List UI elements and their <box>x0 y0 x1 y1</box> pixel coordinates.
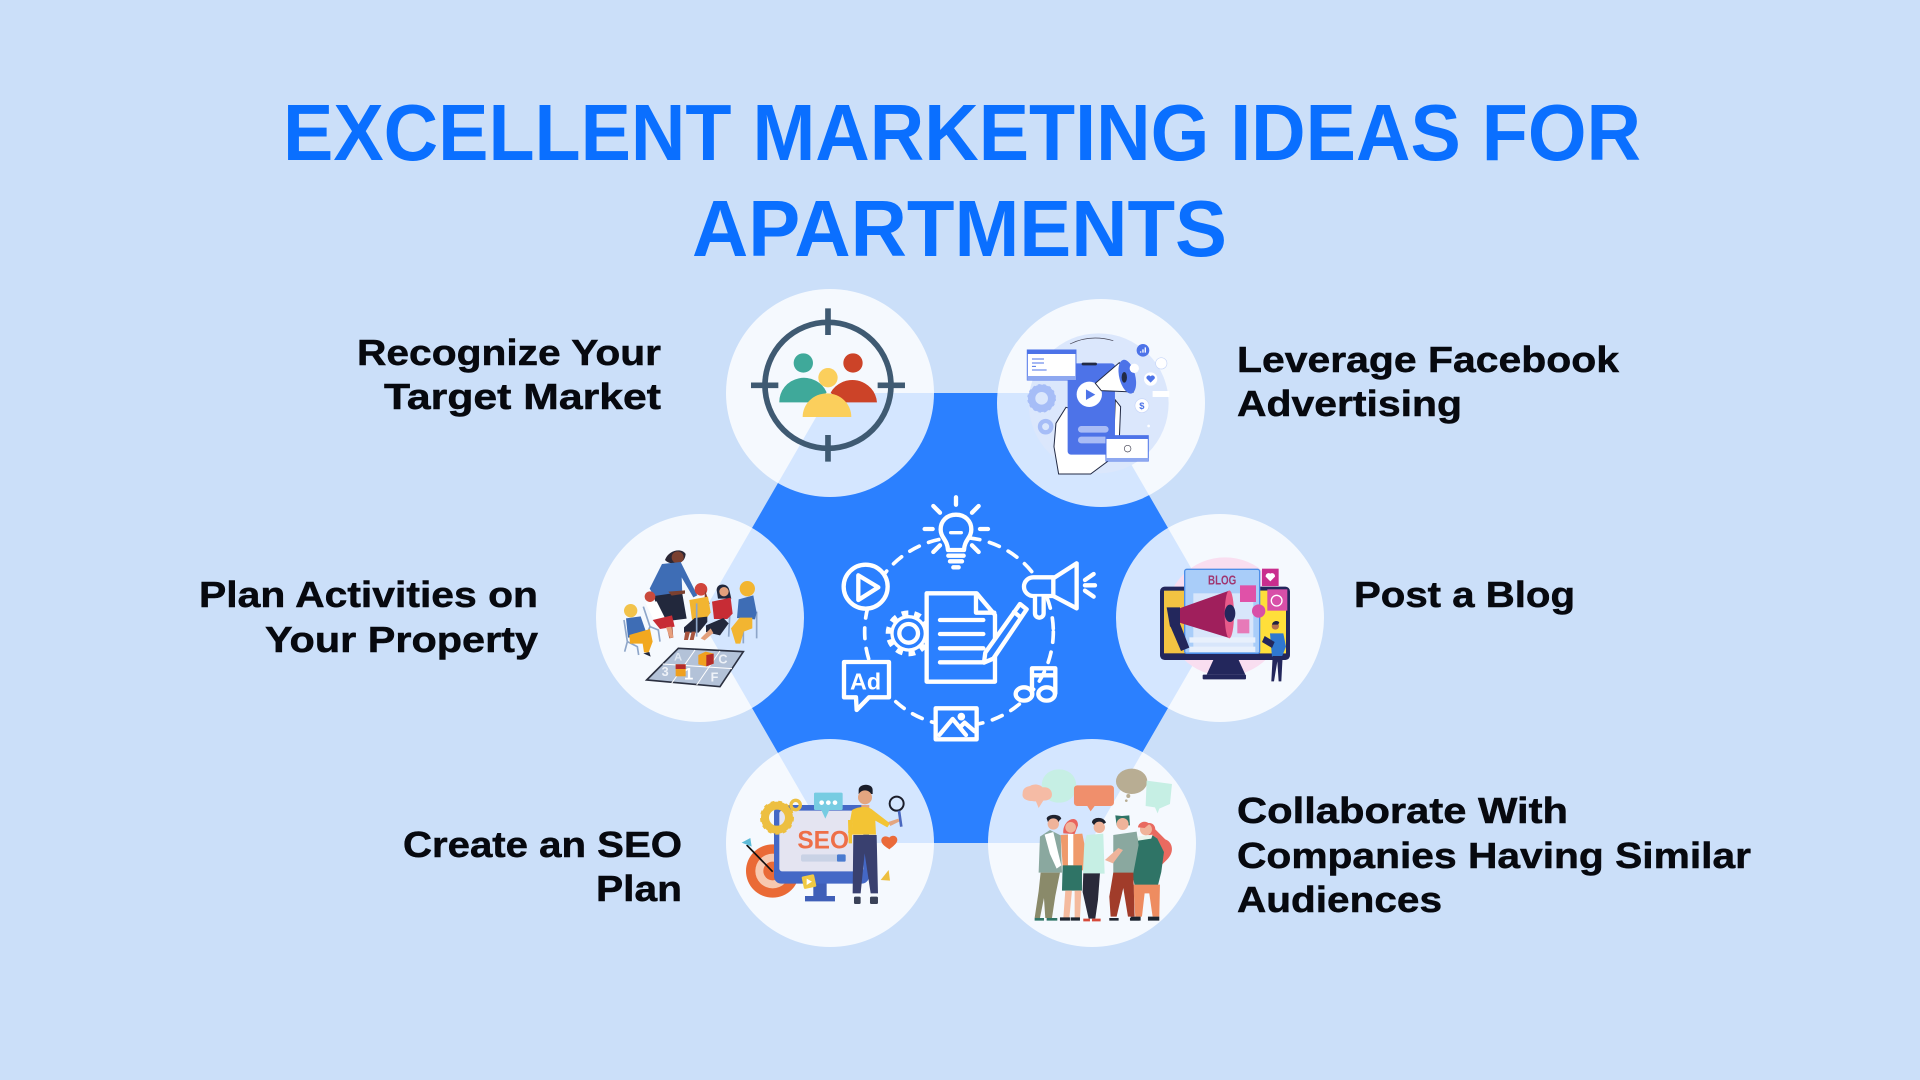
icon: target audience crosshair <box>751 308 905 462</box>
icon: light bulb <box>925 497 988 567</box>
label: collaborate with companies: Companies Having Similar <box>1237 835 1751 876</box>
circle: collaborate <box>988 739 1196 947</box>
seated children <box>624 581 757 657</box>
illustration: phone advertising: $ <box>1139 401 1145 411</box>
label: collaborate with companies: Collaborate With <box>1237 790 1568 831</box>
icon: play button <box>844 565 888 609</box>
icon: gear <box>888 613 929 654</box>
game board: 1 <box>684 664 693 683</box>
person 4 man green <box>1105 815 1139 921</box>
title: APARTMENTS <box>692 184 1227 273</box>
illustration: blog monitor and megaphone: BLOG <box>1208 574 1236 588</box>
illustration: teacher and group activity <box>624 550 757 687</box>
person 3 man mint <box>1073 818 1106 921</box>
game board: C <box>718 652 727 666</box>
person 2 woman orange <box>1060 819 1084 921</box>
illustration: SEO monitor and person: SEO <box>797 827 849 855</box>
label: create an SEO plan <box>403 824 682 909</box>
game board: 3 <box>662 665 669 679</box>
game board: F <box>711 670 719 684</box>
icon: ad bubble: Ad <box>850 668 881 694</box>
central marketing icon <box>844 497 1095 739</box>
circle: recognize target market <box>726 289 934 497</box>
label: collaborate with companies: Audiences <box>1237 879 1442 920</box>
title <box>283 88 1641 273</box>
illustration: SEO monitor and person <box>742 785 904 904</box>
label: post a blog: Post a Blog <box>1354 574 1575 615</box>
label: plan activities on your property: Your Property <box>265 619 538 660</box>
illustration: blog monitor and megaphone <box>1160 557 1290 681</box>
label: collaborate with companies <box>1237 790 1751 920</box>
icon: picture frame <box>936 708 977 739</box>
circle: SEO plan <box>726 739 934 947</box>
illustration: phone advertising <box>1027 333 1169 474</box>
presenter <box>1262 621 1286 681</box>
label: plan activities on your property: Plan Activities on <box>199 574 538 615</box>
circle: plan activities <box>596 514 804 722</box>
label: recognize your target market: Target Market <box>384 376 661 417</box>
person 1 man vest <box>1035 815 1062 921</box>
icon: megaphone <box>1024 563 1095 618</box>
game board: A <box>674 652 682 664</box>
label: leverage facebook advertising <box>1237 339 1620 424</box>
title: EXCELLENT MARKETING IDEAS FOR <box>283 88 1641 177</box>
label: recognize your target market <box>357 332 661 417</box>
person with magnifier <box>848 785 904 904</box>
dashed ring <box>865 537 1053 726</box>
icon: document and pencil <box>927 593 1027 682</box>
speech bubbles <box>1022 769 1172 813</box>
circle: post a blog <box>1116 514 1324 722</box>
game board <box>647 648 743 687</box>
label: leverage facebook advertising: Leverage Facebook <box>1237 339 1620 380</box>
teacher <box>650 550 697 638</box>
circle: leverage facebook <box>997 299 1205 507</box>
icon: music notes <box>1016 668 1055 701</box>
central blue hexagon <box>700 393 1220 843</box>
label: plan activities on your property <box>199 574 538 660</box>
icon: ad bubble <box>844 662 889 710</box>
label: create an SEO plan: Plan <box>596 868 682 909</box>
label: create an SEO plan: Create an SEO <box>403 824 682 865</box>
label: leverage facebook advertising: Advertising <box>1237 383 1462 424</box>
illustration: group conversation <box>1022 769 1172 921</box>
person 5 woman green <box>1131 822 1172 921</box>
label: recognize your target market: Recognize Your <box>357 332 661 373</box>
